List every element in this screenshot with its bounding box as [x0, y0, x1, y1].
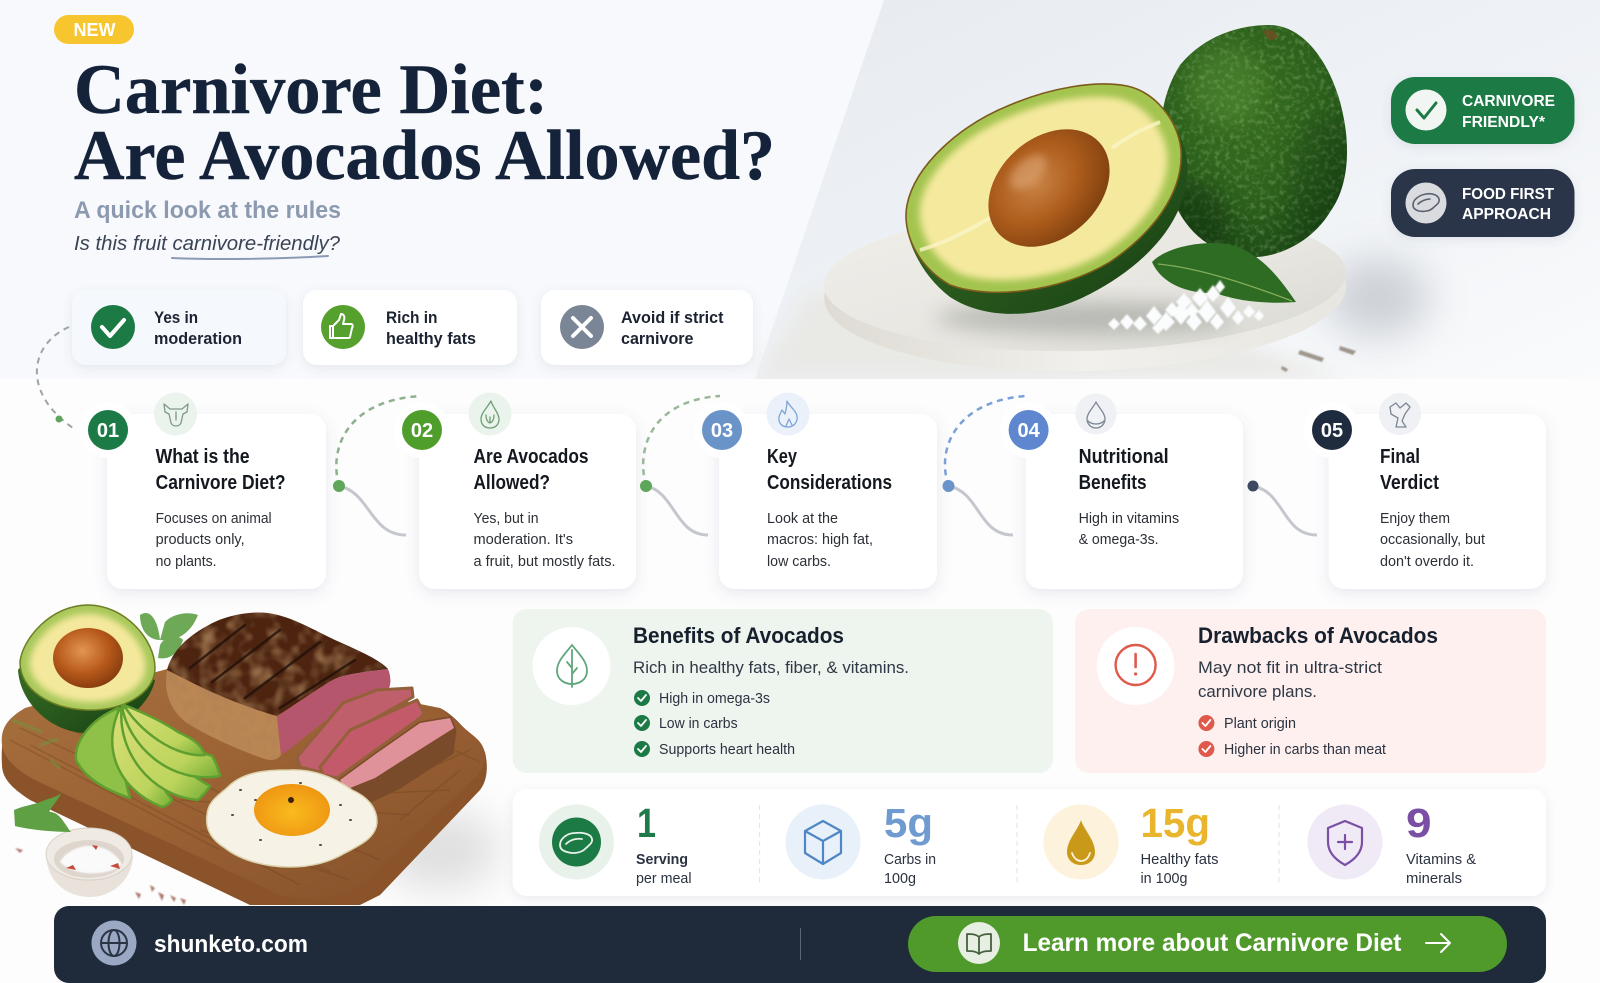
leaf on plate: [1152, 243, 1296, 303]
step 1 card: What is the: [156, 446, 250, 468]
number 05: 05: [1321, 420, 1343, 442]
footer bar: [54, 906, 1546, 983]
step 4 card: Benefits: [1079, 472, 1147, 494]
number 02: [402, 410, 442, 450]
step 5 card: Enjoy them: [1380, 510, 1450, 527]
number 04: [1009, 410, 1049, 450]
step 1 card: products only,: [156, 531, 245, 548]
step 1 card: [80, 392, 326, 589]
step 3 card: low carbs.: [767, 553, 831, 570]
icon: avocado drop: [468, 392, 512, 436]
icon: flame: [766, 392, 810, 436]
stat: healthy fats: in 100g: [1140, 870, 1188, 887]
step 2 card: Allowed?: [474, 472, 550, 494]
step 3 card: Look at the: [767, 510, 838, 527]
stat: carbs: 100g: [884, 870, 916, 887]
benefit bullet 1: High in omega-3s: [659, 690, 770, 707]
panel: benefits of avocados: Benefits of Avocados: [633, 623, 844, 648]
food board illustration: [2, 605, 500, 905]
website: shunketo.com: [154, 931, 308, 958]
panel: drawbacks of avocados: Drawbacks of Avocados: [1198, 623, 1438, 648]
pill: avoid if strict carnivore: [541, 290, 753, 365]
step 3 card: [694, 392, 937, 589]
step 5 card: Verdict: [1380, 472, 1439, 494]
pill: yes in moderation: [72, 290, 286, 365]
call to action button: [908, 916, 1507, 972]
panel: drawbacks of avocados: [1075, 609, 1546, 773]
connector: step 1 to 2: [333, 396, 421, 535]
connector: step 4 to 5: [1248, 480, 1317, 535]
subtitle: A quick look at the rules: [74, 197, 341, 224]
panel: drawbacks of avocados: May not fit in ultra-strict: [1198, 658, 1382, 677]
small leaf: [14, 792, 71, 832]
stat: carbs: 5g: [884, 800, 933, 846]
stat: vitamins: minerals: [1406, 870, 1462, 887]
badge: food first approach: [1391, 169, 1574, 237]
title: Carnivore Diet:: [74, 51, 548, 129]
icon: cow: [154, 392, 197, 436]
step 5 card: occasionally, but: [1380, 531, 1486, 548]
panel: stats: [513, 789, 1546, 896]
step 2 card: [394, 392, 636, 589]
salt crystals: [1108, 280, 1264, 334]
panel: benefits of avocados: [513, 609, 1053, 773]
icon: globe: [92, 920, 136, 966]
pill: yes in moderation: moderation: [154, 329, 242, 348]
pill: avoid if strict carnivore: Avoid if strict: [621, 308, 724, 327]
hero illustration: avocado on marble plate: [755, 20, 1430, 379]
stat: serving: [539, 800, 692, 887]
badge: food first approach: FOOD FIRST: [1462, 186, 1554, 203]
stat: carbs: [786, 800, 936, 887]
icon: warning: [1097, 627, 1175, 705]
connector: arc into step 1: [37, 327, 76, 430]
stat: serving: per meal: [636, 870, 692, 887]
icon: open book: [958, 922, 1000, 964]
icon: arrow: [1426, 934, 1450, 952]
hero panel: [0, 0, 1600, 379]
spices: [15, 848, 186, 905]
benefit bullet 2: Low in carbs: [659, 715, 738, 732]
crumbs: [1281, 346, 1356, 372]
number 04: 04: [1017, 420, 1041, 442]
herb leaves: [140, 613, 198, 658]
number 01: 01: [97, 420, 119, 442]
step 2 card: moderation. It's: [474, 531, 573, 548]
step 5 card: don't overdo it.: [1380, 553, 1474, 570]
stat: vitamins: 9: [1406, 800, 1432, 846]
benefit bullet 3: Supports heart health: [659, 741, 795, 758]
pill: yes in moderation: Yes in: [154, 308, 198, 327]
number 03: [702, 410, 742, 450]
stat: healthy fats: 15g: [1140, 800, 1210, 846]
pill: rich in healthy fats: healthy fats: [386, 329, 476, 348]
step 1 card: no plants.: [156, 553, 217, 570]
stat: carbs: Carbs in: [884, 851, 936, 868]
stat: serving: 1: [637, 800, 656, 846]
avocado slices: [76, 705, 220, 807]
icon: oil drop: [1076, 394, 1116, 434]
salt bowl: [46, 828, 133, 897]
step 2 card: Are Avocados: [474, 446, 588, 468]
number 02: 02: [411, 420, 433, 442]
avocado half: [18, 605, 155, 733]
panel: drawbacks of avocados: carnivore plans.: [1198, 682, 1317, 701]
tagline with underline: Is this fruit carnivore-friendly?: [74, 233, 341, 255]
panel: benefits of avocados: Rich in healthy fats, fiber, & vitamins.: [633, 658, 909, 677]
badge: new: [54, 15, 134, 44]
step 1 card: Carnivore Diet?: [156, 472, 286, 494]
number 05: [1312, 410, 1352, 450]
step 4 card: [1001, 394, 1243, 589]
drawback bullet 2: Higher in carbs than meat: [1224, 741, 1387, 758]
steak slices: [297, 688, 455, 803]
badge: carnivore friendly: [1391, 77, 1574, 144]
step 1 card: Focuses on animal: [156, 510, 272, 527]
steak: [166, 612, 390, 760]
step 2 card: a fruit, but mostly fats.: [474, 553, 616, 570]
step 4 card: & omega-3s.: [1079, 531, 1159, 548]
step 4 card: Nutritional: [1079, 446, 1169, 468]
stat: vitamins: [1308, 800, 1476, 887]
number 01: [88, 410, 128, 450]
badge: carnivore friendly: FRIENDLY*: [1462, 114, 1546, 131]
number 03: 03: [711, 420, 733, 442]
icon: verdict hand: [1379, 393, 1421, 435]
title: [74, 51, 775, 195]
call to action button: Learn more about Carnivore Diet: [1023, 929, 1402, 957]
step 3 card: macros: high fat,: [767, 531, 873, 548]
stat: healthy fats: Healthy fats: [1140, 851, 1218, 868]
step 3 card: Considerations: [767, 472, 892, 494]
fried egg: [207, 770, 377, 867]
step 4 card: High in vitamins: [1079, 510, 1179, 527]
badge: carnivore friendly: CARNIVORE: [1462, 93, 1555, 110]
drawback bullet 1: Plant origin: [1224, 715, 1296, 732]
badge: food first approach: APPROACH: [1462, 206, 1551, 223]
title: Are Avocados Allowed?: [74, 117, 775, 195]
step 3 card: Key: [767, 446, 798, 468]
pill: rich in healthy fats: Rich in: [386, 308, 438, 327]
stat: serving: Serving: [636, 851, 688, 868]
badge: new: NEW: [74, 20, 116, 40]
pill: rich in healthy fats: [303, 290, 517, 365]
pill: avoid if strict carnivore: carnivore: [621, 329, 694, 348]
stat: healthy fats: [1044, 800, 1218, 887]
step 5 card: Final: [1380, 446, 1420, 468]
connector: step 2 to 3: [640, 396, 720, 535]
step 2 card: Yes, but in: [474, 510, 538, 527]
wooden board: [2, 660, 487, 905]
step 5 card: [1304, 393, 1546, 589]
icon: leaf: [532, 627, 610, 705]
stat: vitamins: Vitamins &: [1406, 851, 1476, 868]
connector: step 3 to 4: [942, 396, 1027, 535]
